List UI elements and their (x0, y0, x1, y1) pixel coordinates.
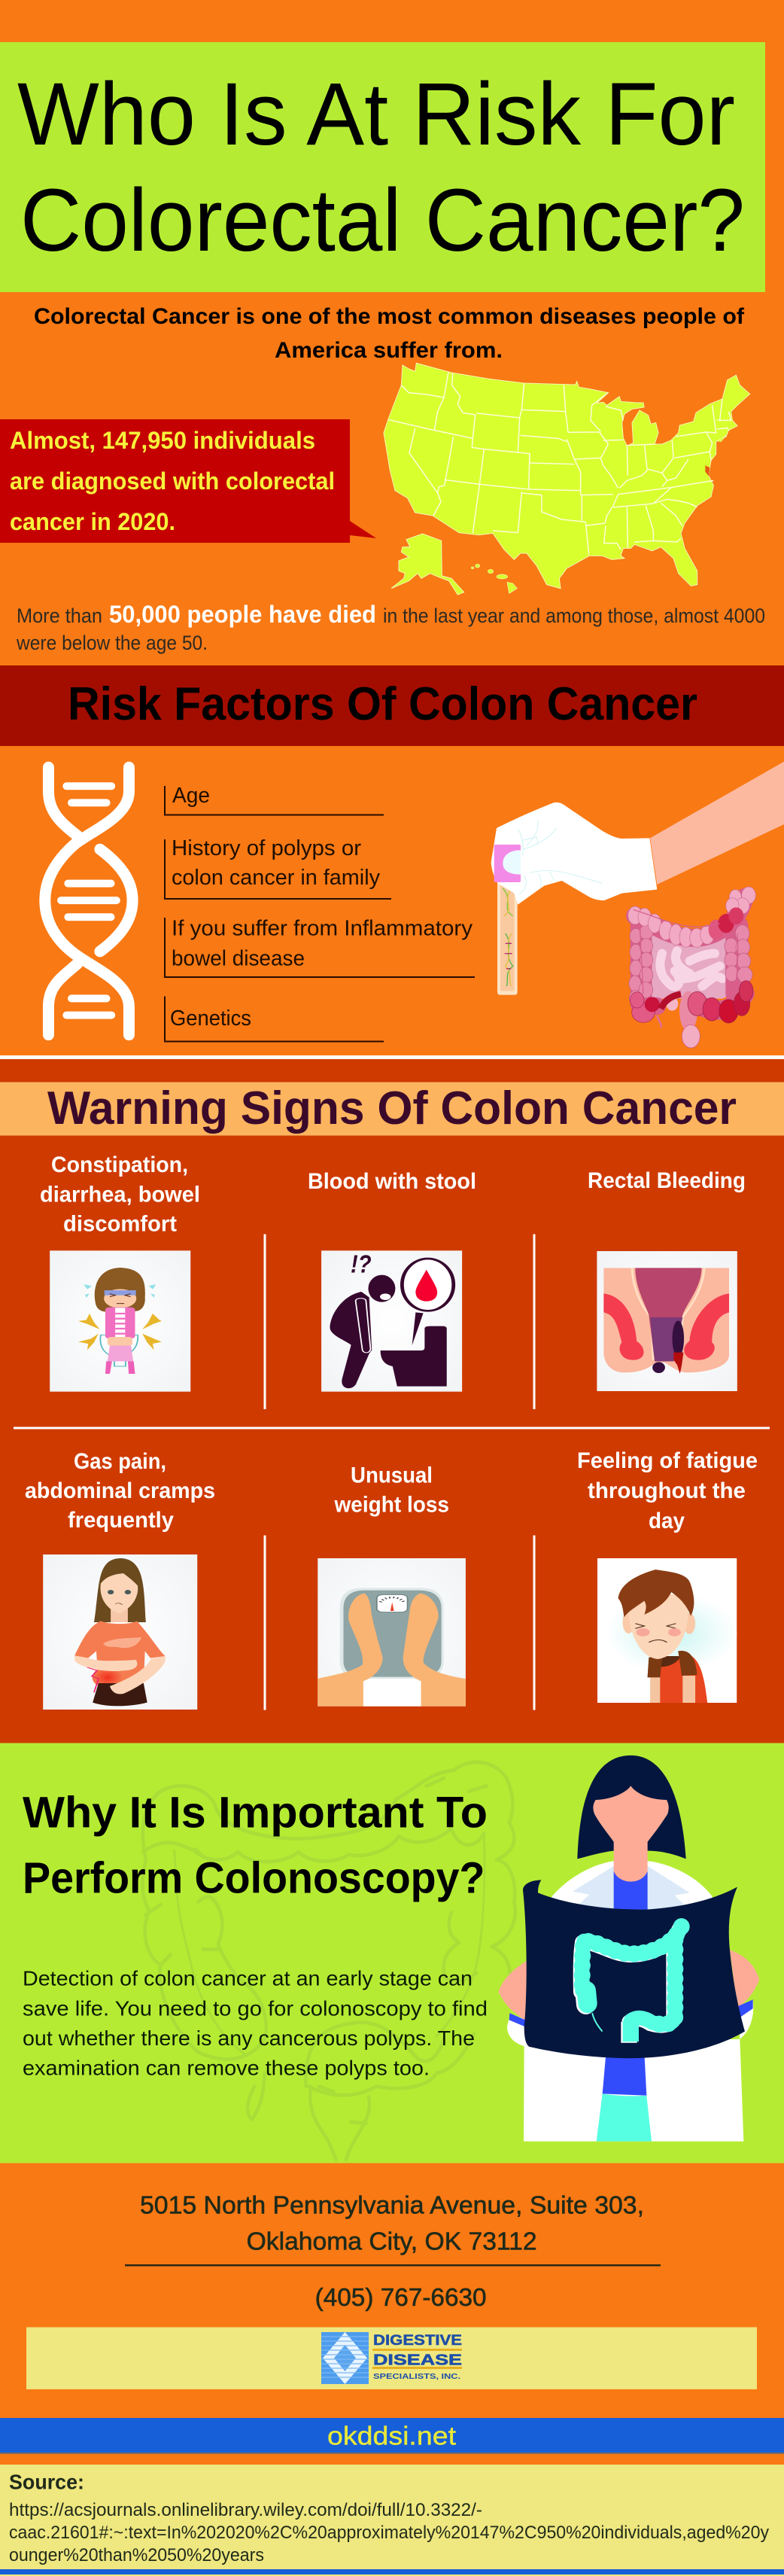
text: deaths statistic: More than (17, 604, 102, 627)
text: colonoscopy paragraph: save life. You need to go for colonoscopy to find (23, 1996, 488, 2020)
icon: girl on toilet (50, 1250, 190, 1392)
icon: man at toilet with blood drop (321, 1250, 462, 1392)
callout: diagnosed individuals (0, 419, 376, 543)
text: deaths statistic: were below the age 50. (16, 632, 208, 654)
risk factor: history of polyps (165, 836, 391, 899)
label: fatigue: day (649, 1509, 685, 1533)
risk factor: age (165, 784, 384, 815)
text: deaths statistic (16, 601, 765, 654)
text: address: Oklahoma City, OK 73112 (247, 2227, 537, 2255)
logo: Digestive Disease Specialists (26, 2328, 757, 2389)
icon: doctor holding colon x-ray (499, 1755, 759, 2142)
heading: why colonoscopy: Why It Is Important To (23, 1789, 488, 1838)
icon: woman with abdominal cramps (43, 1554, 197, 1710)
text: phone: (405) 767-6630 (315, 2283, 487, 2311)
icon: gloved hand holding test tube (491, 762, 784, 995)
panel: title (0, 42, 765, 292)
banner: website (0, 2418, 784, 2454)
label: fatigue: Feeling of fatigue (577, 1448, 758, 1473)
dividers: grid lines (14, 1235, 770, 1710)
banner: website: okddsi.net (327, 2422, 457, 2451)
icon: feet on weight scale (318, 1558, 466, 1707)
title: Colorectal Cancer? (20, 171, 745, 270)
label: unusual weight loss (334, 1463, 449, 1518)
panel: source (0, 2465, 784, 2569)
risk factor: history of polyps: History of polyps or (172, 836, 361, 860)
logo: Digestive Disease Specialists: SPECIALISTS, INC. (373, 2372, 460, 2381)
text: deaths statistic: 50,000 people have died (109, 601, 376, 628)
label: fatigue (577, 1448, 758, 1533)
risk factor: inflammatory bowel disease (165, 917, 475, 977)
callout: diagnosed individuals: Almost, 147,950 individuals (10, 427, 315, 454)
icon: rectal bleeding anatomy (597, 1251, 737, 1391)
text: colonoscopy paragraph: out whether there is any cancerous polyps. The (23, 2026, 475, 2050)
label: constipation: diarrhea, bowel (40, 1182, 200, 1207)
risk factor: inflammatory bowel disease: If you suffer from Inflammatory (172, 917, 473, 941)
panel: risk factors heading (0, 665, 784, 746)
intro text: Colorectal Cancer is one of the most common diseases people of (34, 304, 745, 329)
list: risk factors (165, 784, 475, 1042)
panel: why colonoscopy (0, 1743, 784, 2163)
label: fatigue: throughout the (588, 1478, 746, 1503)
icon: colon illustration (628, 887, 755, 1048)
icon: DNA helix (45, 767, 132, 1035)
panel: contact details (26, 2191, 757, 2389)
label: gas pain (25, 1449, 215, 1533)
callout: diagnosed individuals: cancer in 2020. (10, 508, 175, 535)
panel: risk factors heading: Risk Factors Of Colon Cancer (68, 678, 697, 730)
panel: source: https://acsjournals.onlinelibrary.wiley.com/doi/full/10.3322/- (9, 2500, 482, 2520)
risk factor: age: Age (172, 784, 210, 808)
label: constipation (40, 1153, 200, 1236)
icon: man at toilet with blood drop: !? (351, 1250, 372, 1278)
text: colonoscopy paragraph: examination can remove these polyps too. (23, 2057, 430, 2079)
label: rectal bleeding: Rectal Bleeding (588, 1168, 746, 1193)
intro text (34, 304, 745, 363)
map: United States (384, 363, 750, 595)
label: blood with stool: Blood with stool (308, 1169, 476, 1194)
divider line (125, 2264, 661, 2266)
logo: Digestive Disease Specialists: DIGESTIVE (373, 2333, 462, 2349)
label: constipation: Constipation, (51, 1153, 188, 1177)
text: address: 5015 North Pennsylvania Avenue, Suite 303, (140, 2191, 644, 2218)
title: Who Is At Risk For (17, 65, 735, 164)
callout: diagnosed individuals: are diagnosed with colorectal (10, 467, 335, 495)
label: unusual weight loss: weight loss (334, 1493, 449, 1518)
panel: source: ounger%20than%2050%20years (9, 2545, 264, 2565)
risk factor: genetics: Genetics (170, 1006, 251, 1031)
panel: warning signs (0, 1059, 784, 1743)
risk factor: inflammatory bowel disease: bowel disease (172, 947, 305, 971)
text: colonoscopy paragraph: Detection of colon cancer at an early stage can (23, 1966, 473, 1990)
text: address (140, 2191, 644, 2255)
panel: source: Source: (9, 2471, 84, 2494)
heading: warning signs: Warning Signs Of Colon Cancer (47, 1082, 737, 1134)
label: gas pain: abdominal cramps (25, 1478, 215, 1503)
panel: source: caac.21601#:~:text=In%202020%2C%20approximately%20147%2C950%20individuals,aged%20y (9, 2523, 769, 2543)
icon: ghost colon outline (142, 1762, 515, 2160)
heading: why colonoscopy: Perform Colonoscopy? (23, 1854, 485, 1903)
divider: white line (0, 1055, 784, 1059)
label: constipation: discomfort (63, 1212, 177, 1236)
icon: tired boy (597, 1558, 737, 1703)
heading: why colonoscopy (23, 1789, 488, 1903)
intro text: America suffer from. (275, 338, 503, 363)
text: colonoscopy paragraph (23, 1966, 488, 2079)
label: gas pain: Gas pain, (74, 1449, 166, 1474)
logo: Digestive Disease Specialists: DISEASE (373, 2352, 462, 2369)
title (17, 65, 745, 270)
label: gas pain: frequently (68, 1508, 174, 1533)
risk factor: history of polyps: colon cancer in family (172, 866, 380, 890)
footer bar (0, 2569, 784, 2576)
risk factor: genetics (165, 997, 384, 1042)
label: unusual weight loss: Unusual (351, 1463, 433, 1488)
